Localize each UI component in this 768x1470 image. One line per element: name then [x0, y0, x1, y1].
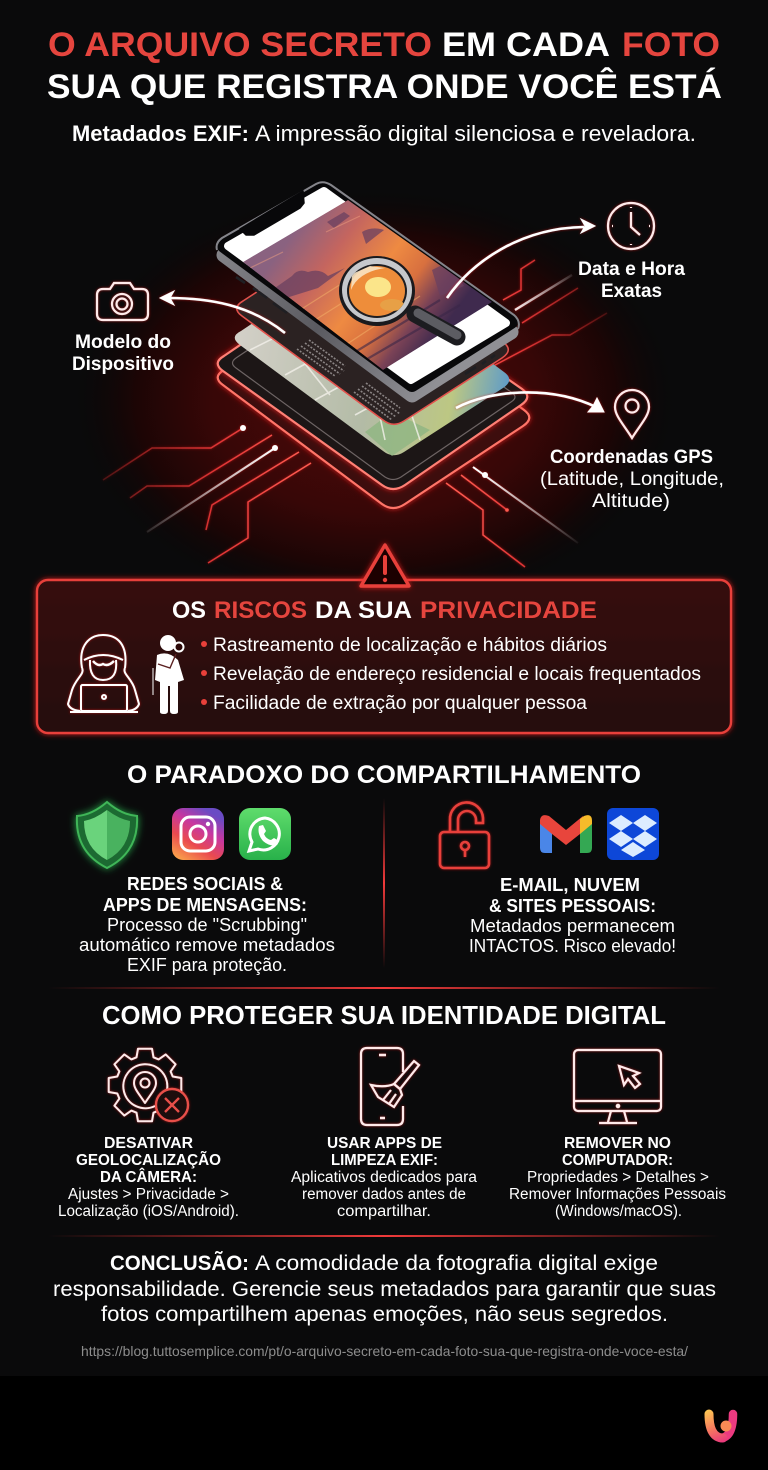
title: FOTO	[622, 26, 720, 64]
conclusion: A comodidade da fotografia digital exige	[255, 1252, 658, 1275]
icon: spy with magnifier	[153, 635, 184, 714]
risks heading: OS	[172, 597, 206, 624]
panel: cleaning apps	[291, 1048, 477, 1220]
layer: bottom outline	[218, 288, 529, 508]
risky platforms text: & SITES PESSOAIS:	[489, 896, 656, 916]
remove on computer text: REMOVER NO	[564, 1135, 671, 1152]
label: device model	[72, 332, 174, 375]
panel: remove on computer	[509, 1050, 726, 1220]
cleaning apps text: LIMPEZA EXIF:	[331, 1152, 438, 1169]
label: device model: Dispositivo	[72, 354, 174, 375]
title: EM CADA	[442, 26, 610, 64]
risky platforms text: E-MAIL, NUVEM	[500, 875, 640, 895]
label: GPS coordinates	[540, 447, 724, 512]
remove on computer text	[509, 1135, 726, 1220]
arrow: to device model	[160, 291, 285, 333]
subtitle	[72, 121, 696, 146]
icon: hacker	[68, 635, 139, 712]
icon: monitor	[574, 1050, 661, 1123]
circuit lines	[103, 260, 607, 567]
icon: shield	[77, 802, 137, 868]
remove on computer text: Remover Informações Pessoais	[509, 1186, 726, 1203]
safe platforms text: REDES SOCIAIS &	[127, 874, 283, 894]
layered metadata cards	[218, 234, 529, 508]
risks heading: RISCOS	[214, 597, 307, 624]
remove on computer text: (Windows/macOS).	[555, 1203, 682, 1220]
icon: clock	[608, 203, 654, 249]
icon: instagram	[172, 808, 224, 860]
layer: text card	[237, 234, 508, 424]
title	[47, 26, 722, 106]
icon: phone with broom	[361, 1048, 419, 1125]
risks heading	[172, 597, 597, 624]
disable geolocation text: Localização (iOS/Android).	[58, 1203, 239, 1220]
divider: protect section	[48, 987, 720, 989]
label: date and time	[578, 259, 685, 302]
risks heading: DA SUA	[315, 597, 412, 624]
remove on computer text: Propriedades > Detalhes >	[527, 1169, 709, 1186]
label: GPS coordinates: Altitude)	[592, 491, 670, 512]
icon: gear with pin	[109, 1049, 188, 1121]
icon: dropbox	[607, 808, 659, 860]
sunset photo	[243, 200, 492, 370]
cleaning apps text	[291, 1135, 477, 1220]
safe platforms text: Processo de "Scrubbing"	[107, 915, 307, 935]
icon: camera	[97, 283, 148, 320]
subtitle: Metadados EXIF:	[72, 121, 249, 146]
source url: https://blog.tuttosemplice.com/pt/o-arquivo-secreto-em-cada-foto-sua-que-registra-onde-voce-esta/	[81, 1343, 688, 1359]
label: GPS coordinates: Coordenadas GPS	[550, 447, 713, 468]
label: device model: Modelo do	[75, 332, 171, 353]
risky platforms text	[469, 875, 676, 956]
heading: protect identity: COMO PROTEGER SUA IDENTIDADE DIGITAL	[102, 1000, 666, 1030]
magnifier ring	[339, 256, 415, 326]
title: O ARQUIVO SECRETO	[48, 26, 432, 64]
heading: sharing paradox: O PARADOXO DO COMPARTILHAMENTO	[127, 761, 641, 789]
icon: open padlock	[440, 802, 489, 868]
panel: disable geolocation	[58, 1049, 239, 1220]
arrow: to date and time	[447, 219, 595, 298]
risks heading: PRIVACIDADE	[420, 597, 597, 624]
phone side	[224, 198, 511, 395]
remove on computer text: COMPUTADOR:	[562, 1152, 673, 1169]
icon: whatsapp	[239, 808, 291, 860]
magnifier handle	[415, 314, 457, 337]
phone with magnifier	[217, 182, 519, 395]
notch	[240, 191, 304, 235]
layer: map	[235, 262, 509, 456]
conclusion: fotos compartilhem apenas emoções, não seus segredos.	[101, 1303, 668, 1326]
logo	[709, 1414, 733, 1438]
risk list: Facilidade de extração por qualquer pessoa	[213, 693, 587, 714]
disable geolocation text: GEOLOCALIZAÇÃO	[76, 1151, 221, 1169]
cleaning apps text: Aplicativos dedicados para	[291, 1169, 477, 1186]
conclusion	[53, 1252, 716, 1326]
label: date and time: Exatas	[601, 281, 662, 302]
disable geolocation text: DESATIVAR	[104, 1135, 193, 1152]
title: SUA QUE REGISTRA ONDE VOCÊ ESTÁ	[47, 68, 722, 106]
conclusion: CONCLUSÃO:	[110, 1252, 249, 1275]
label: GPS coordinates: (Latitude, Longitude,	[540, 469, 724, 490]
risk list	[201, 635, 701, 714]
screen	[228, 191, 506, 380]
panel: risks	[37, 545, 731, 733]
divider: conclusion	[48, 1235, 720, 1237]
risky platforms text: Metadados permanecem	[470, 916, 675, 936]
subtitle: A impressão digital silenciosa e reveladora.	[255, 121, 696, 146]
safe platforms text	[79, 874, 335, 975]
disable geolocation text: DA CÂMERA:	[100, 1168, 197, 1186]
layer: middle outline	[218, 274, 527, 489]
label: date and time: Data e Hora	[578, 259, 685, 280]
risk list: Rastreamento de localização e hábitos diários	[213, 635, 607, 656]
icon: warning triangle	[361, 545, 409, 586]
safe platforms text: automático remove metadados	[79, 935, 335, 955]
magnifier lens	[351, 266, 404, 311]
safe platforms text: APPS DE MENSAGENS:	[103, 895, 307, 915]
phone face	[224, 189, 511, 385]
cleaning apps text: USAR APPS DE	[327, 1135, 442, 1152]
conclusion: responsabilidade. Gerencie seus metadados para garantir que suas	[53, 1278, 716, 1301]
cleaning apps text: remover dados antes de	[302, 1186, 466, 1203]
cleaning apps text: compartilhar.	[337, 1203, 431, 1220]
risky platforms text: INTACTOS. Risco elevado!	[469, 936, 676, 956]
icon: location pin	[615, 390, 649, 438]
disable geolocation text: Ajustes > Privacidade >	[68, 1186, 229, 1203]
divider: vertical	[383, 798, 385, 968]
disable geolocation text	[58, 1135, 239, 1220]
arrow: to GPS	[456, 392, 604, 412]
panel: safe platforms	[77, 802, 335, 975]
safe platforms text: EXIF para proteção.	[127, 955, 287, 975]
layer: inner grey outline	[232, 283, 515, 480]
panel: risky platforms	[440, 802, 676, 956]
risk list: Revelação de endereço residencial e locais frequentados	[213, 664, 701, 685]
icon: gmail	[540, 815, 592, 853]
